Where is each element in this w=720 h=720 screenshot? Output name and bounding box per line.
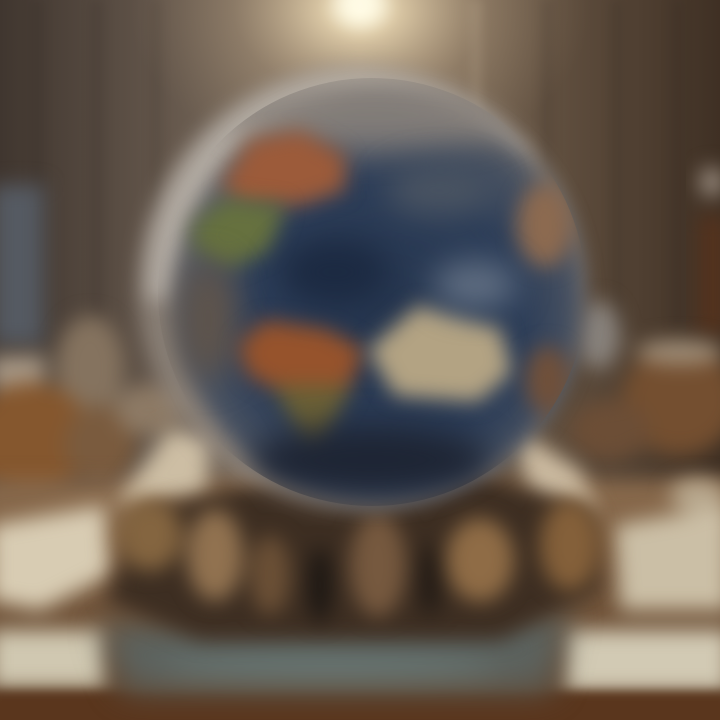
table front edge <box>0 692 720 720</box>
land: cream <box>368 305 512 402</box>
globe highlight rim <box>148 72 530 300</box>
coin stacks <box>105 470 600 640</box>
table surface <box>0 480 720 720</box>
globe sphere <box>173 93 583 503</box>
ocean: dark and light patches <box>250 164 517 494</box>
hazy top of globe <box>220 79 520 151</box>
land: central orange <box>238 320 365 460</box>
left background object: grey-blue panel <box>0 185 44 345</box>
base tray under coins <box>100 610 570 690</box>
right jars and coin piles <box>570 301 720 460</box>
globe halo <box>138 66 582 510</box>
right background object: dark post <box>698 167 720 335</box>
left jars and coin piles <box>0 316 184 498</box>
light glow at top <box>130 0 590 170</box>
globe <box>138 66 583 510</box>
land: right tan <box>517 183 573 267</box>
land: north orange <box>222 130 345 205</box>
land: left grey shade <box>178 260 238 380</box>
white papers on table <box>0 425 720 692</box>
land: green <box>192 198 285 270</box>
